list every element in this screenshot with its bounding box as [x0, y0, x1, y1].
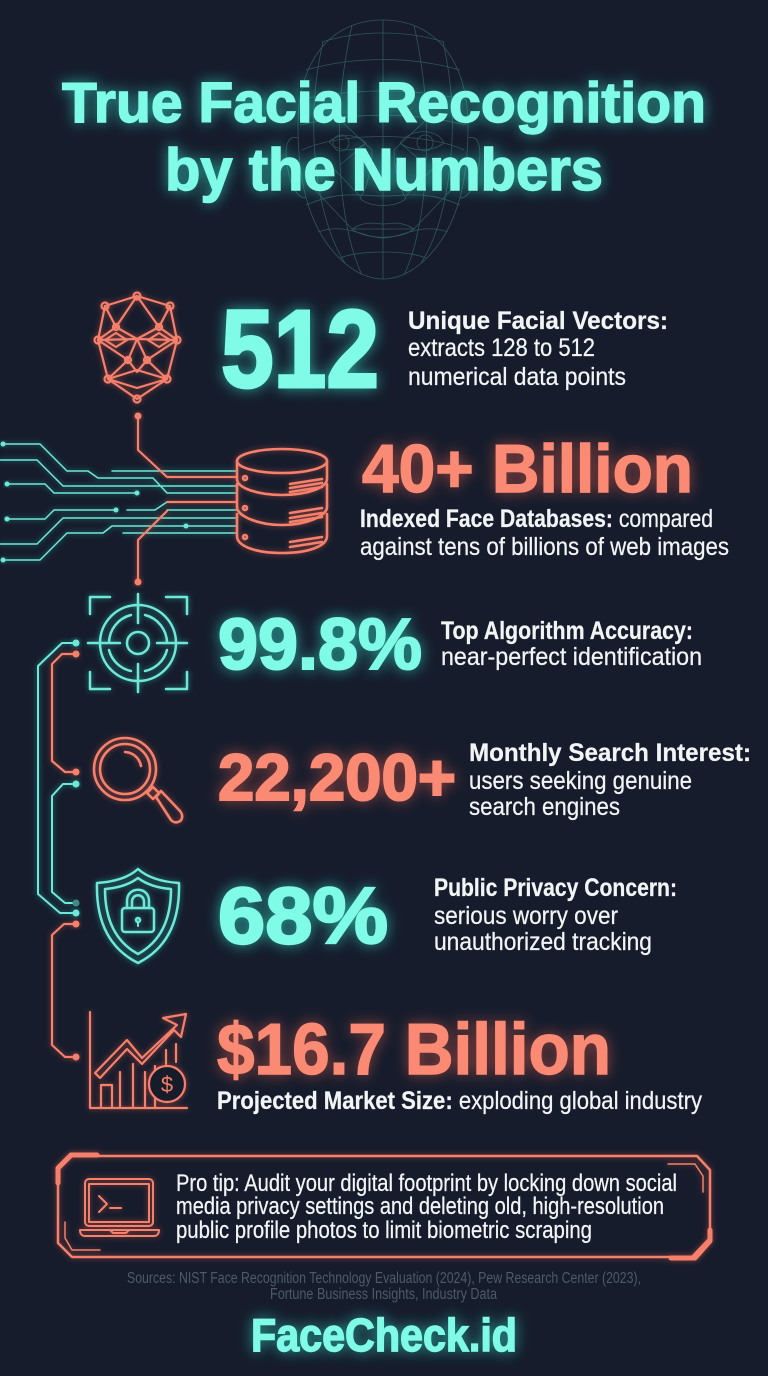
sources — [127, 1270, 641, 1303]
wireframe head background — [286, 20, 480, 279]
text: top algorithm accuracy: near-perfect identification — [441, 643, 702, 671]
title: True Facial Recognition — [62, 71, 706, 135]
text: indexed face databases — [360, 505, 729, 561]
icon: database — [237, 449, 327, 553]
text: monthly search interest: search engines — [469, 793, 620, 821]
stat: 68%: 68% — [218, 871, 388, 960]
frame — [58, 1155, 710, 1258]
text: top algorithm accuracy: Top Algorithm Accuracy: — [441, 617, 693, 645]
text: public privacy concern: Public Privacy Concern: — [434, 874, 677, 902]
pro tip text: Pro tip: Audit your digital footprint by locking down social — [176, 1170, 677, 1197]
text: public privacy concern: unauthorized tracking — [434, 928, 652, 956]
text: public privacy concern — [434, 874, 677, 956]
icon: shield with lock — [97, 869, 179, 963]
icon: magnifier — [94, 738, 182, 822]
stat: 40+ billion: 40+ Billion — [362, 431, 693, 507]
brand: FaceCheck.id: FaceCheck.id — [251, 1309, 517, 1361]
sources: Fortune Business Insights, Industry Data — [270, 1286, 497, 1303]
icon: face mesh — [94, 292, 180, 402]
text: unique facial vectors: extracts 128 to 512 — [408, 334, 595, 362]
title: by the Numbers — [165, 137, 603, 203]
title — [62, 71, 706, 203]
text: unique facial vectors: Unique Facial Vectors: — [408, 307, 668, 335]
pro tip text: media privacy settings and deleting old, high-resolution — [176, 1193, 664, 1220]
icon: market growth chart: $ — [161, 1072, 173, 1097]
side circuit connectors — [38, 640, 80, 1060]
pro tip text: public profile photos to limit biometric scraping — [176, 1217, 592, 1244]
text: monthly search interest: users seeking genuine — [469, 767, 692, 795]
text: indexed face databases: against tens of billions of web images — [360, 533, 729, 561]
text: public privacy concern: serious worry over — [434, 902, 618, 930]
text: projected market size: Projected Market Size: exploding global industry — [217, 1087, 702, 1115]
stat: 99.8%: 99.8% — [218, 605, 422, 685]
stat: 22,200+: 22,200+ — [218, 740, 456, 814]
pro tip text — [176, 1170, 677, 1244]
icon: target reticle — [88, 594, 187, 692]
text: monthly search interest: Monthly Search Interest: — [469, 739, 751, 767]
stat: $16.7 billion: $16.7 Billion — [217, 1010, 611, 1090]
sources: Sources: NIST Face Recognition Technology Evaluation (2024), Pew Research Center (2023), — [127, 1270, 641, 1287]
icon: market growth chart — [90, 1012, 187, 1108]
text: unique facial vectors: numerical data points — [408, 363, 626, 391]
circuit traces into database — [0, 412, 237, 586]
text: indexed face databases: Indexed Face Databases: compared — [360, 505, 713, 533]
stat: 512: 512 — [221, 288, 379, 411]
icon: laptop terminal — [80, 1179, 159, 1236]
panel: pro tip — [58, 1155, 710, 1258]
text: monthly search interest — [469, 739, 751, 821]
text: unique facial vectors — [408, 307, 668, 391]
text: top algorithm accuracy — [441, 617, 702, 671]
